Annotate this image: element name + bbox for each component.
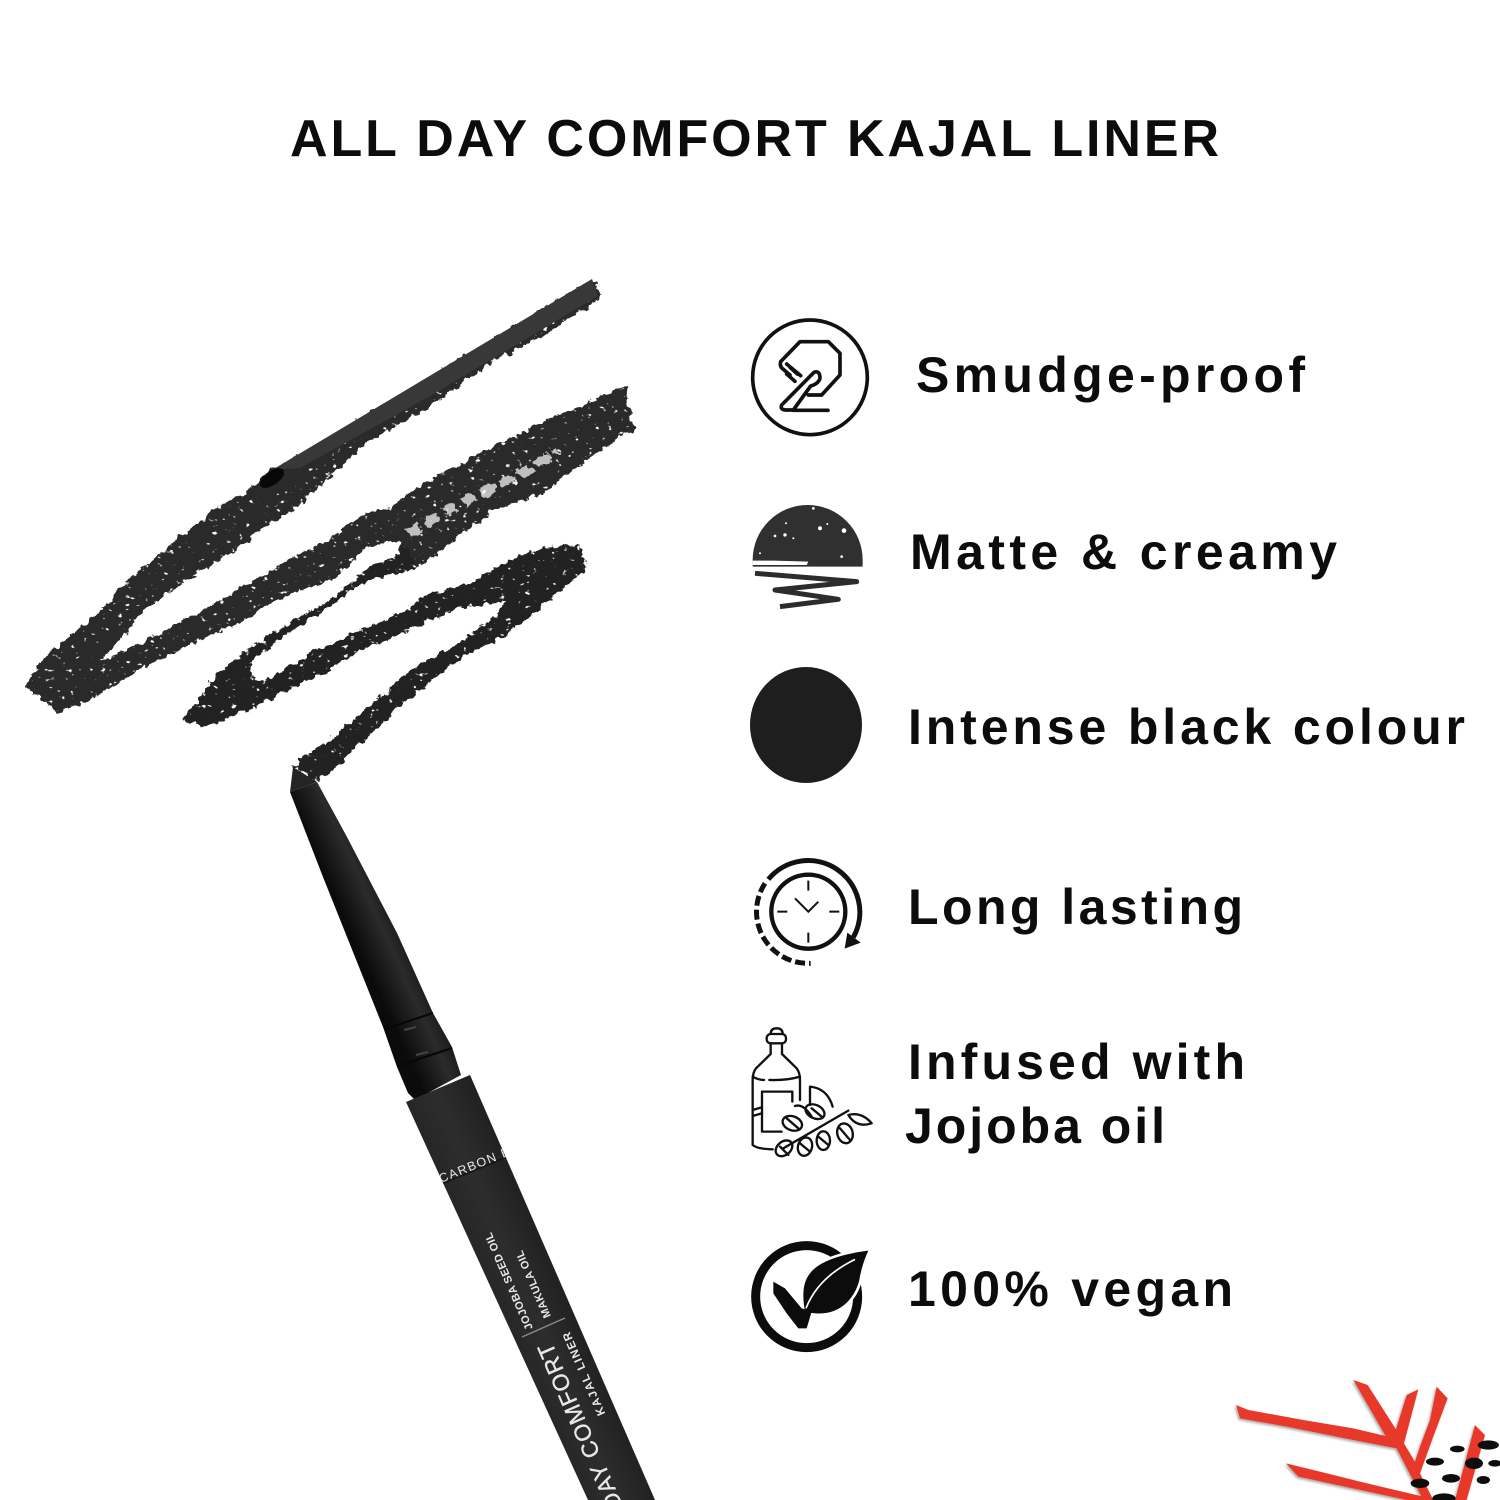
red branches (1236, 1380, 1485, 1500)
pencil lead tip (290, 767, 317, 792)
label: Smudge-proof (916, 347, 1305, 403)
feature: long lasting (756, 861, 1243, 963)
icon: textured half swatch (753, 505, 863, 607)
shade name: CARBON BLACK (437, 1130, 549, 1186)
crisp upper edge of top stroke (272, 279, 598, 470)
pencil collar rings (385, 1013, 452, 1066)
product type: KAJAL LINER (561, 1329, 608, 1417)
decorative red branch with black seeds (1236, 1380, 1500, 1500)
label: Intense black colour (908, 699, 1465, 755)
textured strokes (25, 279, 633, 780)
black seeds (1411, 1440, 1500, 1500)
ingredient one: JOJOBA SEED OIL (483, 1230, 536, 1332)
barrel printed text (440, 1149, 621, 1500)
feature: matte and creamy (753, 505, 1337, 607)
feature: intense black colour (750, 667, 1465, 783)
label: Matte & creamy (910, 524, 1337, 580)
divider (522, 1318, 565, 1337)
icon: black swatch (750, 667, 862, 783)
barrel joint shade (441, 1157, 507, 1184)
half circle (753, 505, 863, 567)
label: Long lasting (908, 879, 1243, 935)
icon: clock with circular arrow (756, 861, 861, 963)
pencil barrel (406, 1075, 655, 1500)
squiggle (755, 573, 857, 607)
icon: oil bottle and jojoba sprig (753, 1028, 872, 1159)
feature: infused with jojoba oil (753, 1028, 1245, 1159)
kajal swatch scribble (25, 279, 633, 780)
label line two: Jojoba oil (905, 1098, 1165, 1154)
feature: smudge-proof (753, 320, 1305, 435)
feature: vegan (756, 1246, 1233, 1348)
label line one: Infused with (908, 1034, 1245, 1090)
title: ALL DAY COMFORT KAJAL LINER (290, 110, 1219, 168)
ingredient two: MAKULA OIL (514, 1248, 554, 1320)
pencil tapered cone (290, 782, 461, 1100)
kajal pencil (290, 767, 655, 1500)
icon: finger smudge (753, 320, 867, 435)
speckles (753, 507, 846, 565)
icon: leaf check badge (756, 1246, 868, 1348)
dark pressure mark (257, 464, 287, 492)
label: 100% vegan (908, 1261, 1233, 1317)
